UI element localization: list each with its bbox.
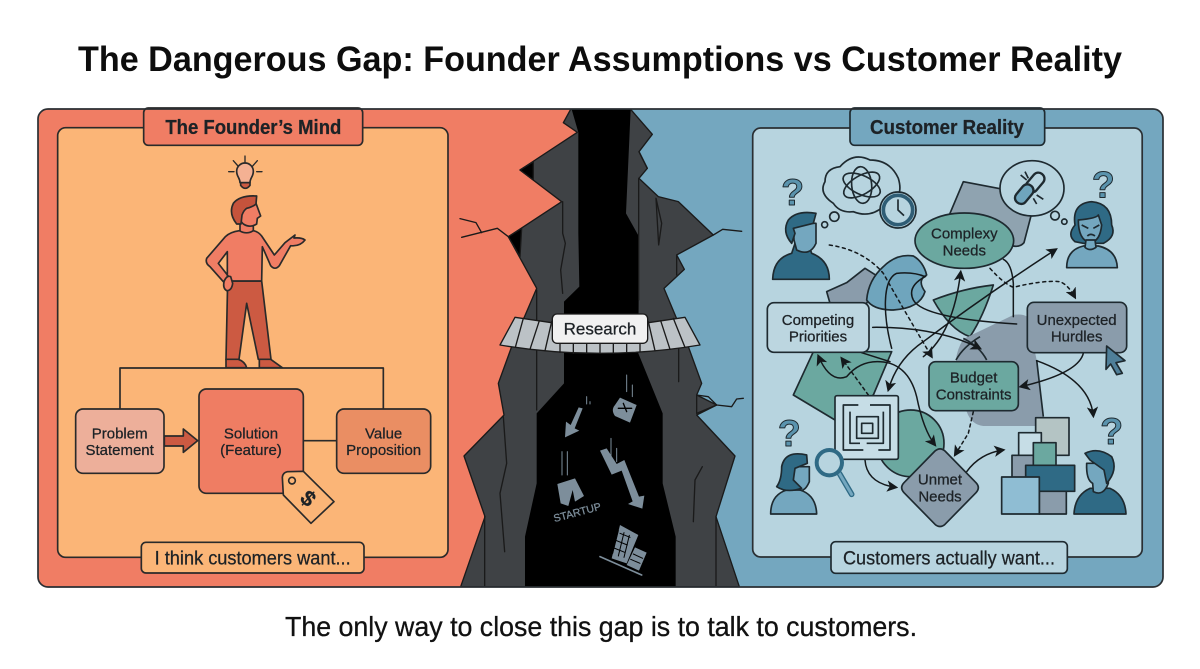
icon: person top right — [1067, 163, 1117, 268]
icon: person lower right — [1074, 410, 1126, 514]
nodes and people lower — [771, 346, 1126, 573]
icon: broken chain bubble — [1000, 161, 1067, 224]
heading: customer reality: Customer Reality — [870, 117, 1024, 139]
label: research: Research — [564, 320, 636, 339]
icon: person top left — [773, 171, 829, 279]
bottom tagline: The only way to close this gap is to talk to customers. — [285, 611, 917, 642]
box: solution feature — [199, 389, 303, 493]
icon: founder figure — [206, 196, 305, 368]
panel background — [38, 109, 1163, 587]
icon: magnifier — [817, 450, 852, 494]
icon: light bulb — [229, 156, 262, 188]
chasm — [460, 109, 743, 587]
box: problem statement: Problem — [92, 425, 148, 442]
node: budget constraints — [929, 362, 1018, 411]
surface cracks — [460, 219, 743, 407]
callout: i think customers want: I think customers want... — [155, 549, 351, 570]
tangled arrows — [818, 245, 1093, 487]
box: value proposition — [337, 409, 431, 473]
background blobs lower — [793, 314, 1043, 477]
node: unmet needs — [902, 449, 978, 526]
box: solution feature: Solution — [224, 425, 278, 442]
node: complexy needs: Needs — [943, 242, 986, 259]
icon: person lower left: ? — [778, 412, 801, 454]
icon: falling startup logo: STARTUP — [552, 501, 603, 525]
icon: falling startup logo — [552, 452, 603, 525]
inner panel backdrop — [753, 128, 1142, 557]
node: unmet needs: Unmet — [918, 472, 963, 489]
heading: the founder's mind: The Founder’s Mind — [165, 117, 341, 139]
heading: customer reality — [850, 108, 1045, 145]
icon: price tag — [282, 471, 334, 523]
panel outline — [38, 109, 1163, 587]
icon: falling arrow — [565, 397, 590, 437]
icon: person top left: ? — [781, 171, 804, 213]
box: solution feature: (Feature) — [220, 442, 282, 459]
chasm black void — [525, 109, 676, 587]
box: value proposition: Proposition — [346, 442, 421, 459]
nodes and people upper — [767, 108, 1127, 353]
node: complexy needs — [915, 213, 1014, 268]
callout: i think customers want — [141, 542, 364, 573]
heading: the founder's mind — [144, 108, 363, 145]
icon: person top right: ? — [1092, 163, 1115, 205]
icon: falling trend arrow — [600, 438, 644, 509]
icon: person lower left — [771, 412, 817, 514]
icon: person lower right: ? — [1100, 410, 1123, 452]
node: unexpected hurdles: Unexpected — [1037, 312, 1117, 329]
node: budget constraints: Budget — [950, 370, 998, 387]
rock cracks — [485, 152, 717, 586]
icon: falling building — [600, 525, 647, 575]
node: unexpected hurdles — [1027, 302, 1127, 353]
panel: customer reality — [753, 108, 1142, 573]
node: competing priorities — [767, 303, 869, 352]
icon: cursor — [1106, 346, 1125, 375]
chasm rock walls — [461, 109, 739, 587]
title: The Dangerous Gap: Founder Assumptions vs Customer Reality — [78, 40, 1123, 79]
background blobs upper — [827, 182, 1032, 337]
node: budget constraints: Constraints — [936, 386, 1012, 403]
panel: the founder's mind — [58, 108, 448, 573]
node: competing priorities: Priorities — [789, 329, 847, 346]
icon: price tag: $ — [295, 485, 321, 512]
icon: block stack — [1002, 418, 1075, 514]
node: unmet needs: Needs — [918, 488, 962, 505]
node: unexpected hurdles: Hurdles — [1051, 329, 1102, 346]
callout: customers actually want: Customers actually want... — [843, 549, 1055, 570]
bridge: research — [500, 314, 700, 353]
node: complexy needs: Complexy — [931, 226, 998, 243]
icon: maze — [835, 396, 898, 459]
arrow: problem to solution — [164, 429, 198, 452]
box: value proposition: Value — [365, 425, 402, 442]
falling icons — [552, 375, 647, 575]
box: problem statement — [76, 409, 164, 473]
node: competing priorities: Competing — [782, 312, 854, 329]
icon: falling product card — [613, 375, 637, 423]
callout: customers actually want — [831, 542, 1067, 573]
connector lines — [120, 368, 383, 441]
box: problem statement: Statement — [86, 442, 155, 459]
label: research — [552, 314, 648, 343]
icon: thought cloud with tangle and clock — [822, 157, 916, 228]
